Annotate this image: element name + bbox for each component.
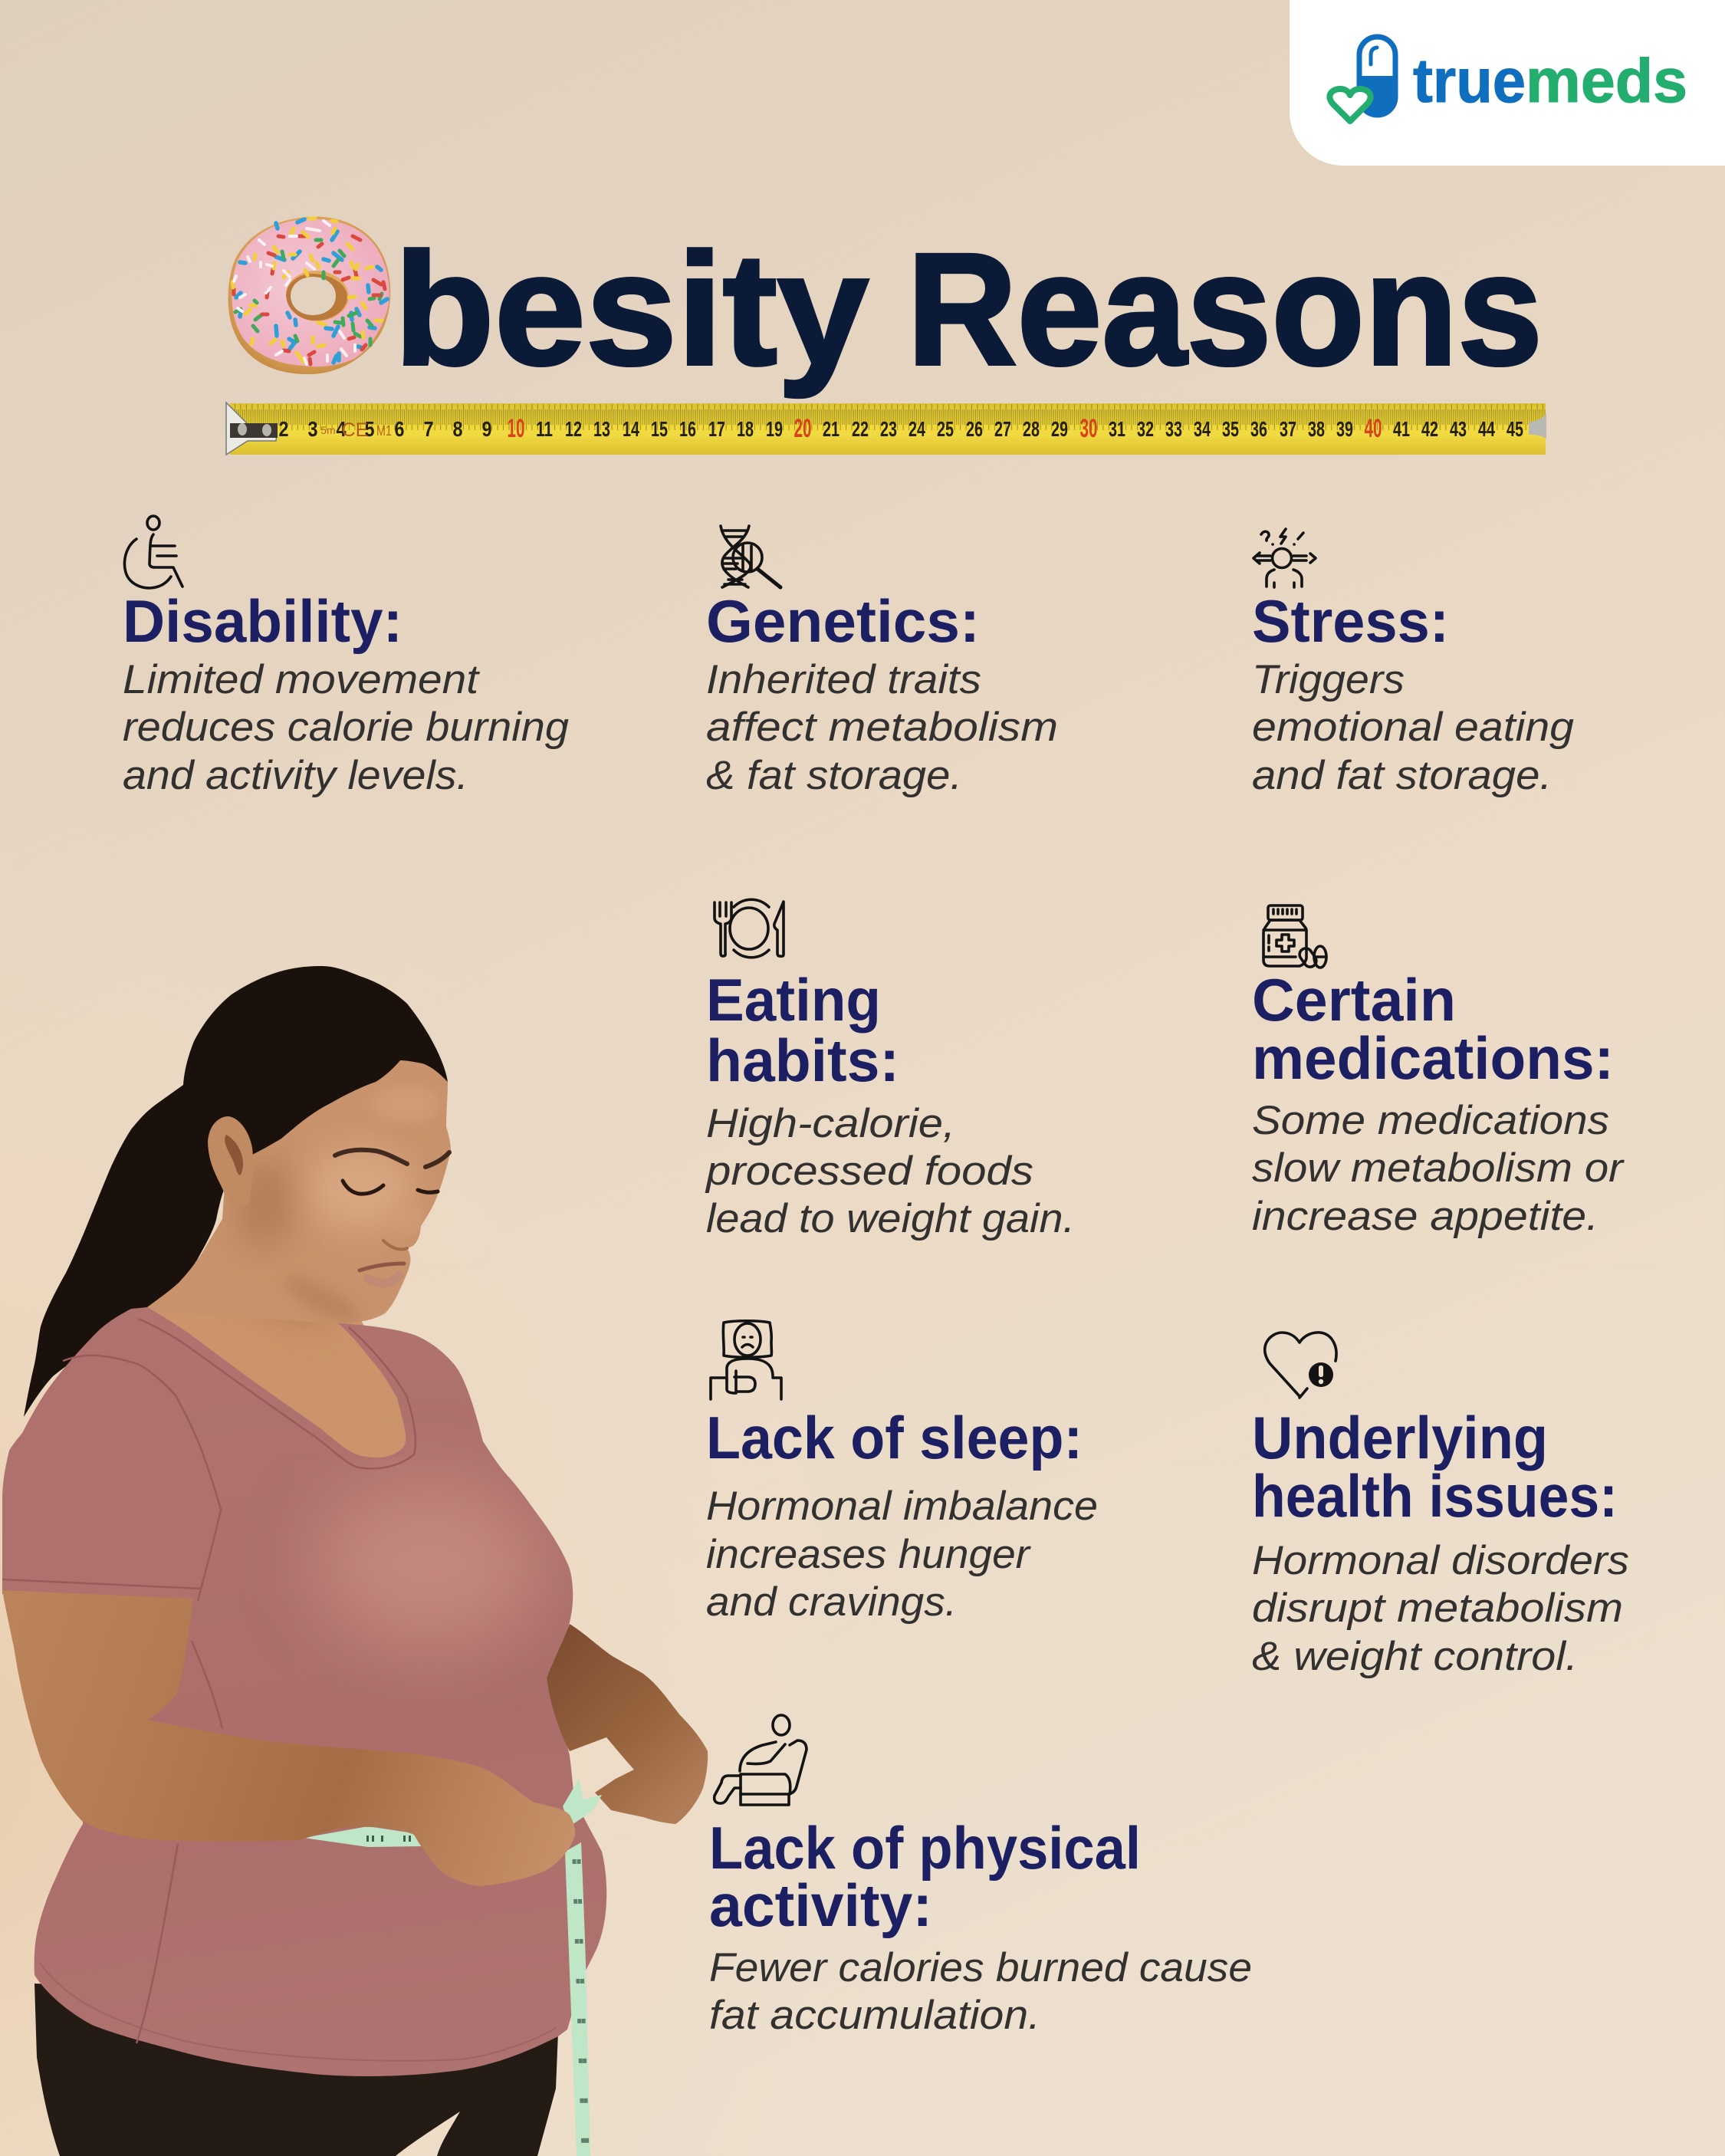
logo wordmark — [1413, 47, 1687, 116]
tape numbers: 3 — [308, 417, 317, 441]
tape numbers: 31 — [1109, 417, 1125, 441]
tape numbers: 26 — [966, 417, 983, 441]
measuring tape at waist — [304, 1826, 423, 1847]
panel: certain medications — [1252, 905, 1625, 1239]
tape numbers: 2 — [279, 417, 288, 441]
tape numbers: 45 — [1506, 417, 1523, 441]
description — [123, 657, 570, 798]
title — [394, 221, 1543, 399]
tape numbers: 17 — [708, 417, 725, 441]
description: Some medications — [1252, 1098, 1609, 1143]
icon: person in armchair — [715, 1715, 807, 1805]
description — [705, 1101, 1075, 1241]
description: & fat storage. — [706, 753, 962, 798]
tape numbers: 40 — [1365, 414, 1382, 443]
heading — [709, 1814, 1141, 1939]
measuring tape vertical strip — [565, 1842, 590, 2156]
heading — [706, 966, 899, 1094]
panel: stress — [1252, 529, 1575, 798]
tape numbers: 10 — [508, 414, 524, 443]
tape numbers: 18 — [737, 417, 754, 441]
tape numbers: 35 — [1222, 417, 1239, 441]
tape numbers: 38 — [1308, 417, 1325, 441]
tape numbers: 42 — [1421, 417, 1438, 441]
tape numbers: 28 — [1023, 417, 1040, 441]
tape markings — [574, 1859, 587, 2151]
description: & weight control. — [1252, 1634, 1578, 1679]
tape numbers: 4 — [336, 417, 347, 441]
title: besity — [394, 221, 869, 399]
panel: lack of physical activity — [709, 1715, 1252, 2038]
tape numbers: 37 — [1280, 417, 1296, 441]
description: affect metabolism — [706, 705, 1058, 750]
description: reduces calorie burning — [123, 705, 570, 750]
description — [1252, 1098, 1625, 1239]
face shading — [238, 1086, 441, 1330]
description: Fewer calories burned cause — [709, 1945, 1252, 1990]
description: Inherited traits — [706, 657, 981, 702]
tape numbers: 11 — [536, 417, 553, 441]
heading: activity: — [709, 1872, 932, 1939]
tape numbers: 36 — [1250, 417, 1267, 441]
panel: genetics — [706, 526, 1058, 798]
tape numbers: 25 — [937, 417, 954, 441]
tape numbers: 41 — [1393, 417, 1410, 441]
description — [706, 657, 1058, 798]
description: increase appetite. — [1252, 1194, 1598, 1239]
heading: medications: — [1252, 1024, 1614, 1092]
logo panel — [1290, 0, 1725, 166]
heading: Lack of sleep: — [706, 1404, 1083, 1471]
heading — [1252, 966, 1614, 1092]
tape numbers: 44 — [1478, 417, 1495, 441]
description: lead to weight gain. — [706, 1196, 1075, 1241]
tape numbers: 9 — [481, 417, 492, 441]
description: and fat storage. — [1252, 753, 1552, 798]
description — [706, 1484, 1098, 1625]
tape numbers: 19 — [766, 417, 783, 441]
description: disrupt metabolism — [1252, 1586, 1623, 1631]
tape numbers: 14 — [623, 417, 639, 441]
icon: DNA with magnifier — [721, 526, 780, 587]
logo wordmark: meds — [1526, 47, 1687, 116]
face — [146, 1050, 451, 1323]
tape numbers: M1 — [376, 423, 392, 439]
left arm and hand — [2, 1590, 575, 1886]
tape numbers: 5 — [365, 417, 374, 441]
t-shirt body — [22, 1307, 606, 2076]
tape numbers: 22 — [852, 417, 869, 441]
icon: wheelchair — [124, 516, 182, 588]
description: Hormonal imbalance — [706, 1484, 1098, 1529]
facial features — [335, 1150, 449, 1283]
tape numbers: 24 — [909, 417, 925, 441]
description: and cravings. — [706, 1579, 957, 1625]
heading: Underlying — [1252, 1404, 1548, 1471]
tape numbers: 5m — [320, 424, 336, 436]
tape numbers: 32 — [1137, 417, 1154, 441]
tape numbers: 33 — [1165, 417, 1182, 441]
leggings — [34, 1983, 558, 2156]
tape numbers: 13 — [593, 417, 610, 441]
tape numbers: 39 — [1336, 417, 1353, 441]
icon: capsule — [1359, 37, 1395, 115]
panel: lack of sleep — [706, 1321, 1098, 1625]
tape hook — [226, 403, 278, 455]
tape numbers: 29 — [1051, 417, 1068, 441]
hair and ponytail — [24, 966, 448, 1417]
tape markings at waist — [366, 1836, 414, 1842]
description: Limited movement — [123, 657, 480, 702]
title: Reasons — [907, 221, 1543, 399]
heading: Stress: — [1252, 587, 1449, 655]
description: emotional eating — [1252, 705, 1575, 750]
icon: stressed person — [1254, 529, 1316, 587]
tape numbers: 21 — [823, 417, 840, 441]
shirt highlight — [314, 1480, 544, 1648]
sleeve — [2, 1309, 221, 1601]
heading: Certain — [1252, 966, 1456, 1034]
icon: heart with warning — [1265, 1333, 1336, 1398]
tape numbers: 15 — [651, 417, 668, 441]
tape numbers: 30 — [1079, 414, 1098, 443]
icon: tired person with pillow — [711, 1321, 781, 1399]
tape numbers: 8 — [452, 417, 463, 441]
tape numbers: 20 — [794, 414, 811, 443]
heading — [1252, 1404, 1618, 1530]
ear — [208, 1116, 253, 1205]
shirt seams — [2, 1319, 556, 2061]
tape numbers: 43 — [1450, 417, 1467, 441]
panel: eating habits — [705, 899, 1075, 1241]
description: High-calorie, — [706, 1101, 955, 1146]
chest skin — [130, 1265, 437, 1461]
tape numbers: 23 — [880, 417, 897, 441]
description: and activity levels. — [123, 753, 468, 798]
heading: health issues: — [1252, 1462, 1618, 1530]
icon: donut as letter O — [228, 217, 390, 374]
panel: disability — [123, 516, 570, 798]
description: Triggers — [1252, 657, 1405, 702]
heading: Lack of physical — [709, 1814, 1141, 1882]
panel: underlying health issues — [1252, 1333, 1629, 1679]
icon: heart — [1329, 89, 1371, 121]
heading: habits: — [706, 1027, 899, 1094]
inner ear — [225, 1135, 243, 1175]
description — [1252, 1538, 1629, 1679]
tape numbers: 7 — [423, 417, 434, 441]
heading: Disability: — [123, 587, 402, 655]
heading: Genetics: — [706, 587, 980, 655]
description: fat accumulation. — [709, 1993, 1040, 2038]
right arm and hand — [547, 1624, 708, 1824]
logo wordmark: true — [1413, 47, 1526, 116]
description: slow metabolism or — [1252, 1145, 1625, 1191]
description — [1252, 657, 1575, 798]
tape numbers: CE — [342, 419, 368, 441]
description — [709, 1945, 1252, 2038]
tape in fingers — [563, 1779, 602, 1826]
tape numbers: 12 — [565, 417, 582, 441]
measuring tape — [226, 403, 1546, 455]
tape numbers — [279, 414, 1523, 443]
tape numbers: 16 — [679, 417, 696, 441]
tape end cap — [1529, 414, 1546, 439]
tape numbers: 6 — [394, 417, 405, 441]
neck shadow — [211, 1239, 341, 1337]
tape numbers: 34 — [1194, 417, 1211, 441]
description: processed foods — [705, 1149, 1033, 1194]
tape numbers: 27 — [994, 417, 1011, 441]
heading: Eating — [706, 966, 881, 1034]
woman measuring her waist — [2, 966, 708, 2156]
description: Hormonal disorders — [1252, 1538, 1629, 1583]
icon: plate and cutlery — [715, 899, 784, 958]
icon: pill bottle — [1263, 905, 1326, 969]
description: increases hunger — [706, 1532, 1031, 1577]
